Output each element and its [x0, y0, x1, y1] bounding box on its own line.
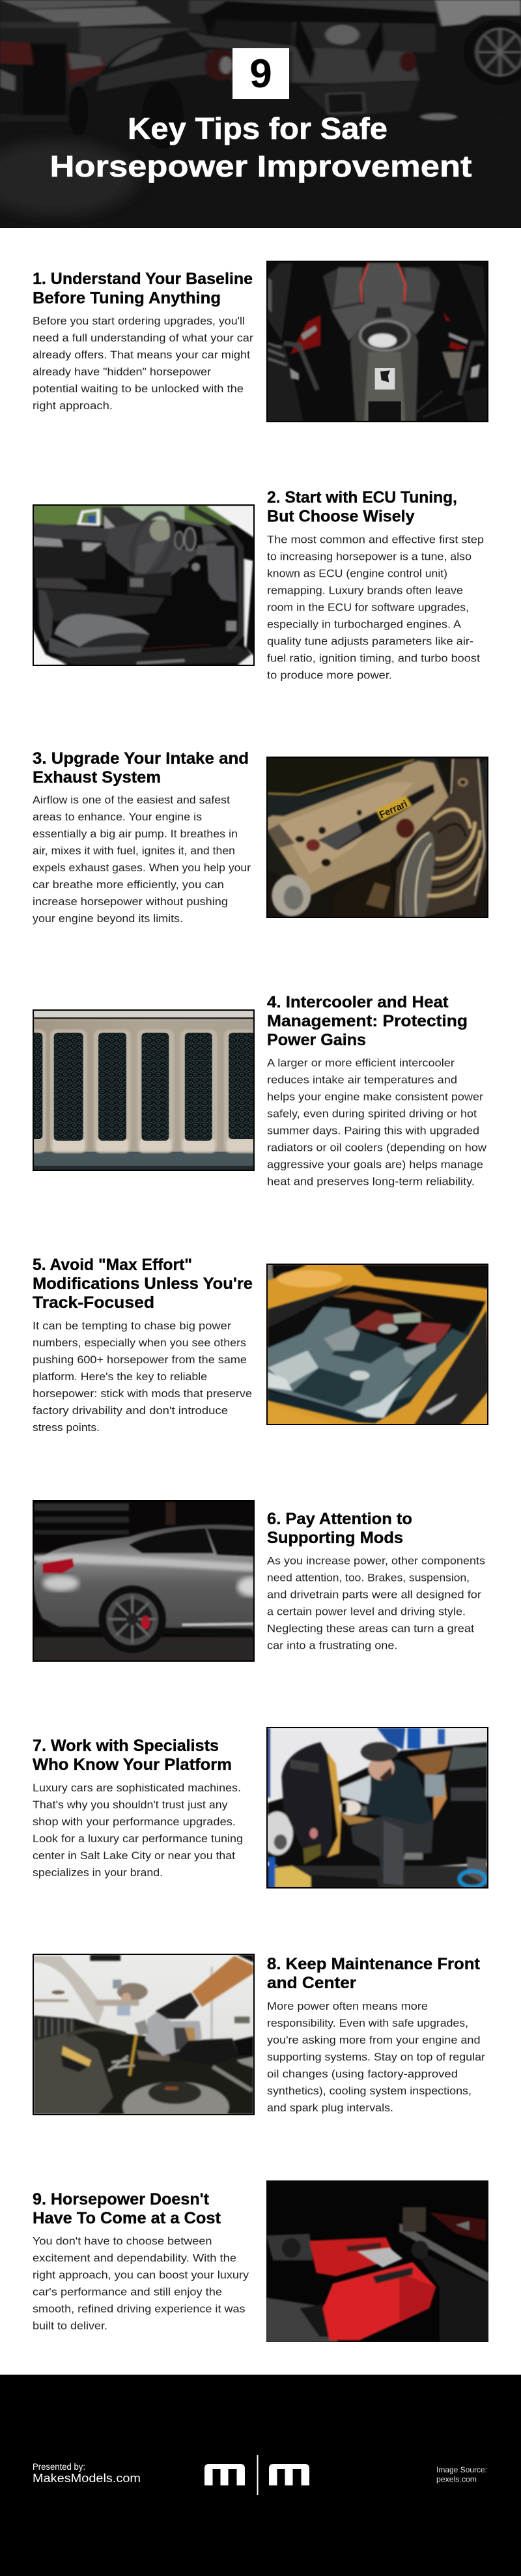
body text: tip 8: and spark plug intervals.	[267, 2102, 393, 2114]
body text: tip 4: A larger or more efficient intercooler	[267, 1057, 455, 1069]
body text: tip 2: remapping. Luxury brands often leave	[267, 584, 463, 597]
body text: tip 2: fuel ratio, ignition timing, and turbo boost	[267, 652, 480, 665]
body text: tip 9	[33, 2235, 249, 2332]
heading: tip 6: 6. Pay Attention to	[267, 1510, 412, 1528]
body text: tip 7: center in Salt Lake City or near you that	[33, 1849, 235, 1862]
body text: tip 7: shop with your performance upgrades.	[33, 1816, 236, 1828]
body text: tip 6: car into a frustrating one.	[267, 1640, 397, 1651]
body text: tip 3: areas to enhance. Your engine is	[33, 811, 202, 823]
body text: tip 1: already have "hidden" horsepower	[33, 366, 211, 378]
body text: tip 4: aggressive your goals are) helps manage	[267, 1159, 483, 1170]
photo: red engine intake covers	[266, 2180, 488, 2342]
body text: tip 8: oil changes (using factory-approved	[267, 2068, 458, 2080]
heading: tip 1: Before Tuning Anything	[33, 289, 221, 308]
panel: hero header	[0, 0, 521, 228]
image source credit: Image Source:	[436, 2465, 487, 2474]
body text: tip 2: especially in turbocharged engines. A	[267, 618, 462, 631]
body text: tip 9: car's performance and still enjoy the	[33, 2286, 222, 2298]
body text: tip 2: to produce more power.	[267, 669, 392, 682]
body text: tip 6: As you increase power, other components	[267, 1555, 485, 1567]
body text: tip 5: stress points.	[33, 1421, 100, 1434]
heading: tip 3: Exhaust System	[33, 768, 161, 787]
body text: tip 7	[33, 1782, 243, 1879]
body text: tip 2: The most common and effective first step	[267, 533, 484, 546]
body text: tip 9: smooth, refined driving experience it was	[33, 2303, 245, 2315]
body text: tip 2: quality tune adjusts parameters like air-	[267, 635, 473, 648]
body text: tip 1: already offers. That means your car might	[33, 349, 250, 361]
body text: tip 2: to increasing horsepower is a tune, also	[267, 550, 472, 563]
heading: tip 1: 1. Understand Your Baseline	[33, 270, 253, 288]
photo: gold Ferrari engine and exhaust headers: Ferrari	[378, 798, 409, 821]
heading: tip 3: 3. Upgrade Your Intake and	[33, 749, 249, 768]
body text: tip 1: potential waiting to be unlocked with the	[33, 383, 244, 395]
body text: tip 6: Neglecting these areas can turn a great	[267, 1623, 474, 1634]
panel: tip 6	[33, 1500, 485, 1662]
heading: tip 7: 7. Work with Specialists	[33, 1737, 219, 1755]
heading: tip 8: 8. Keep Maintenance Front	[267, 1955, 481, 1973]
body text: tip 3: Airflow is one of the easiest and safest	[33, 794, 230, 806]
panel: footer	[0, 2375, 521, 2576]
body text: tip 1: need a full understanding of what your car	[33, 332, 253, 344]
body text: tip 6: and drivetrain parts were all designed for	[267, 1589, 481, 1600]
heading: tip 9: Have To Come at a Cost	[33, 2209, 221, 2227]
body text: tip 5: platform. Here's the key to reliable	[33, 1370, 207, 1383]
panel: tip 2	[33, 489, 484, 682]
heading: tip 4	[267, 993, 468, 1049]
heading: tip 8: and Center	[267, 1974, 356, 1992]
body text: tip 7: Luxury cars are sophisticated machines.	[33, 1782, 241, 1794]
number badge: 9: 9	[249, 51, 272, 96]
body text: tip 8: More power often means more	[267, 2000, 428, 2012]
photo: yellow supercar engine under glass	[266, 1264, 488, 1425]
body text: tip 9: excitement and dependability. With the	[33, 2252, 236, 2264]
presented by credit: Presented by:	[33, 2462, 85, 2472]
body text: tip 4: reduces intake air temperatures and	[267, 1074, 457, 1086]
panel: tip 3	[33, 749, 488, 925]
photo: car front grille with honeycomb mesh	[33, 1009, 255, 1171]
body text: tip 5: horsepower: stick with mods that preserve	[33, 1387, 252, 1400]
body text: tip 5: pushing 600+ horsepower from the same	[33, 1353, 247, 1366]
heading: tip 6	[267, 1510, 412, 1547]
panel: tip 4	[12, 993, 487, 1187]
body text: tip 4: safely, even during spirited driving or hot	[267, 1108, 477, 1120]
panel: tip 7	[33, 1727, 488, 1889]
presented by credit	[33, 2462, 141, 2485]
title	[49, 111, 472, 183]
body text: tip 3: your engine beyond its limits.	[33, 912, 183, 925]
image source credit: pexels.com	[436, 2475, 477, 2484]
heading: tip 9: 9. Horsepower Doesn't	[33, 2190, 210, 2208]
photo: grey sports car side profile	[33, 1500, 255, 1662]
logo: MM	[204, 2455, 309, 2495]
body text: tip 8: responsibility. Even with safe upgrades,	[267, 2017, 468, 2029]
heading: tip 4: 4. Intercooler and Heat	[267, 993, 449, 1011]
heading: tip 6: Supporting Mods	[267, 1529, 403, 1547]
body text: tip 2: known as ECU (engine control unit)	[267, 567, 447, 580]
heading: tip 8	[267, 1955, 481, 1992]
body text: tip 3: expels exhaust gases. When you help your	[33, 861, 251, 874]
body text: tip 4: radiators or oil coolers (depending on how	[267, 1142, 487, 1153]
title: Key Tips for Safe	[128, 111, 387, 145]
heading: tip 5: 5. Avoid "Max Effort"	[33, 1256, 192, 1274]
body text: tip 4: helps your engine make consistent power	[267, 1091, 483, 1103]
heading: tip 5: Track-Focused	[33, 1294, 154, 1312]
heading: tip 4: Management: Protecting	[267, 1012, 468, 1030]
body text: tip 8	[267, 2000, 485, 2114]
body text: tip 4: summer days. Pairing this with upgraded	[267, 1125, 479, 1136]
body text: tip 1	[33, 315, 253, 412]
hero photo: dark rear view of tuned car in workshop	[0, 0, 521, 228]
photo: technician working on car door	[266, 1727, 488, 1889]
body text: tip 8: you're asking more from your engine and	[267, 2034, 481, 2046]
photo: luxury car interior through open door	[33, 504, 255, 666]
body text: tip 6	[267, 1555, 485, 1651]
body text: tip 9: built to deliver.	[33, 2320, 107, 2332]
heading: tip 2	[267, 489, 457, 525]
body text: tip 7: That's why you shouldn't trust just any	[33, 1799, 228, 1811]
heading: tip 5: Modifications Unless You're	[33, 1275, 253, 1293]
photo: gold Ferrari engine and exhaust headers	[266, 757, 488, 918]
body text: tip 3	[33, 794, 251, 925]
body text: tip 6: a certain power level and driving style.	[267, 1606, 466, 1617]
body text: tip 5: numbers, especially when you see others	[33, 1337, 246, 1349]
body text: tip 2: room in the ECU for software upgrades,	[267, 601, 469, 614]
body text: tip 3: increase horsepower without pushing	[33, 895, 228, 908]
body text: tip 5: factory drivability and don't introduce	[33, 1404, 228, 1417]
heading: tip 7: Who Know Your Platform	[33, 1756, 232, 1774]
heading: tip 2: 2. Start with ECU Tuning,	[267, 489, 457, 507]
number badge: 9	[232, 48, 289, 99]
heading: tip 1	[33, 270, 253, 308]
heading: tip 2: But Choose Wisely	[267, 507, 415, 525]
heading: tip 9	[33, 2190, 221, 2227]
body text: tip 4	[267, 1057, 487, 1187]
panel: tip 9	[33, 2180, 488, 2342]
heading: tip 4: Power Gains	[267, 1031, 366, 1049]
body text: tip 2	[267, 533, 484, 682]
body text: tip 9: right approach, you can boost your luxury	[33, 2269, 249, 2281]
panel: tip 5	[33, 1256, 488, 1434]
photo: carbon fibre engine bay with badge	[266, 261, 488, 422]
body text: tip 6: need attention, too. Brakes, suspension,	[267, 1572, 470, 1584]
heading: tip 5	[33, 1256, 253, 1312]
body text: tip 7: Look for a luxury car performance tuning	[33, 1832, 243, 1845]
body text: tip 3: air, mixes it with fuel, ignites it, and then	[33, 845, 235, 857]
panel: tip 8	[33, 1954, 485, 2132]
photo: pouring oil into engine	[33, 1954, 255, 2115]
body text: tip 5	[33, 1320, 252, 1434]
body text: tip 5: It can be tempting to chase big power	[33, 1320, 231, 1332]
body text: tip 7: specializes in your brand.	[33, 1866, 163, 1879]
body text: tip 8: synthetics), cooling system inspections,	[267, 2085, 472, 2097]
presented by credit: MakesModels.com	[33, 2471, 141, 2485]
heading: tip 7	[33, 1737, 232, 1774]
body text: tip 1: right approach.	[33, 399, 113, 412]
heading: tip 3	[33, 749, 249, 787]
title: Horsepower Improvement	[49, 149, 472, 183]
image source credit	[436, 2465, 487, 2484]
body text: tip 3: essentially a big air pump. It breathes in	[33, 828, 238, 840]
body text: tip 4: heat and preserves long-term reliability.	[267, 1176, 475, 1187]
body text: tip 8: supporting systems. Stay on top of regular	[267, 2051, 485, 2063]
body text: tip 3: car breathe more efficiently, you can	[33, 878, 224, 891]
body text: tip 1: Before you start ordering upgrades, you'll	[33, 315, 245, 327]
panel: tip 1	[33, 261, 488, 422]
body text: tip 9: You don't have to choose between	[33, 2235, 212, 2247]
